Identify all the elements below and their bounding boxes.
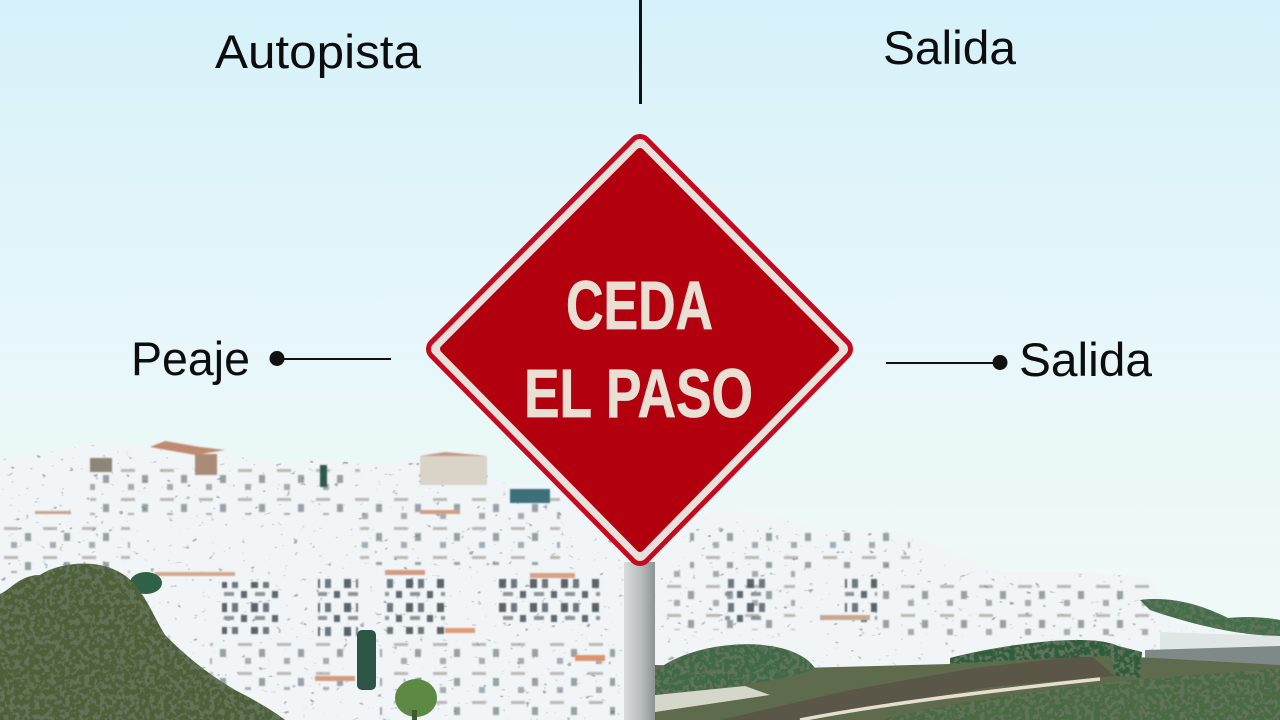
label: Autopista: Autopista	[215, 25, 422, 78]
center line	[639, 0, 642, 104]
label: Peaje with connector: Peaje	[131, 332, 250, 385]
label: Salida top: Salida	[883, 21, 1017, 74]
olive tree foreground	[0, 564, 285, 720]
far right trees and terrace	[1140, 599, 1280, 672]
red outer diamond	[438, 146, 841, 554]
sign text: CEDA	[566, 267, 713, 344]
town shading and windows	[0, 441, 1150, 715]
label: Salida right with connector	[886, 333, 1153, 386]
yield sign	[438, 146, 841, 554]
label: Peaje with connector	[131, 332, 391, 385]
sign text	[524, 267, 753, 432]
red face	[444, 152, 835, 548]
sign post	[624, 562, 655, 720]
white border band	[438, 146, 841, 554]
cypress and small tree	[130, 572, 437, 720]
slopes: retaining walls and olive groves	[655, 640, 1280, 720]
sign text: EL PASO	[524, 355, 753, 432]
label: Salida right with connector: Salida	[1019, 333, 1153, 386]
photo: white hillside town	[0, 441, 1280, 720]
town silhouette	[0, 442, 1280, 720]
